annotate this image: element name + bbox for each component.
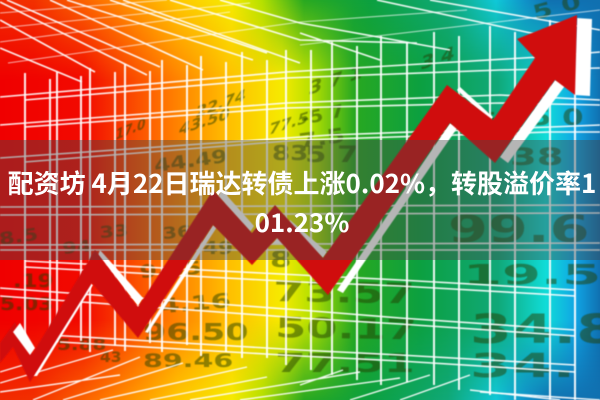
faded number texture: 3 7 1 xyxy=(307,60,364,100)
faded number texture: 19.5 xyxy=(463,259,600,291)
faded number texture: 9.55 xyxy=(139,258,202,283)
title: 01.23% xyxy=(255,203,349,240)
translucent title band xyxy=(0,140,600,260)
faded number texture: 96.50 xyxy=(143,318,248,346)
faded number texture: -5 7 xyxy=(299,102,346,129)
faded number texture: 73.57 xyxy=(273,275,415,310)
faded number texture: .19 xyxy=(13,270,53,292)
white highlight on first peak xyxy=(13,323,35,355)
faded number texture: 94 xyxy=(62,237,92,258)
faded number texture: 22.74 xyxy=(194,85,247,122)
faded number texture: 17.0 xyxy=(114,115,147,144)
faded number texture: 5.88 xyxy=(57,336,106,354)
faded number texture: 3 4 xyxy=(419,42,456,75)
faded number texture: .5 xyxy=(470,109,497,130)
faded number texture: 36 xyxy=(162,223,192,243)
faded number texture: 83 xyxy=(272,142,308,165)
faded number texture: 94.16 xyxy=(138,289,232,320)
faded number texture: 38 xyxy=(510,143,563,171)
faded number texture: 49 xyxy=(203,238,233,259)
faded number texture: 77.5 xyxy=(267,108,310,139)
faded number texture: 43.50 xyxy=(177,104,232,139)
faded number texture: 33 xyxy=(99,222,129,242)
title xyxy=(8,164,596,240)
faded number texture: 8 xyxy=(270,247,291,273)
faded number texture: 50.17 xyxy=(275,311,417,346)
faded number texture: 89.46 xyxy=(143,350,233,372)
faded number texture: 99.6 xyxy=(448,208,589,251)
title: 配资坊 4月22日瑞达转债上涨0.02%，转股溢价率1 xyxy=(8,164,596,201)
faded number texture: 43 xyxy=(100,350,121,366)
faded number texture: 5 7 xyxy=(305,142,359,168)
faded number texture: 5.03 xyxy=(0,294,53,315)
faded number texture: 7.5 xyxy=(297,124,346,153)
faded number texture: 77.51 xyxy=(275,348,415,378)
faded number texture: 34. xyxy=(470,347,575,385)
faded number texture: 44.49 xyxy=(153,145,229,176)
faded number texture: 5 0 xyxy=(530,105,584,131)
